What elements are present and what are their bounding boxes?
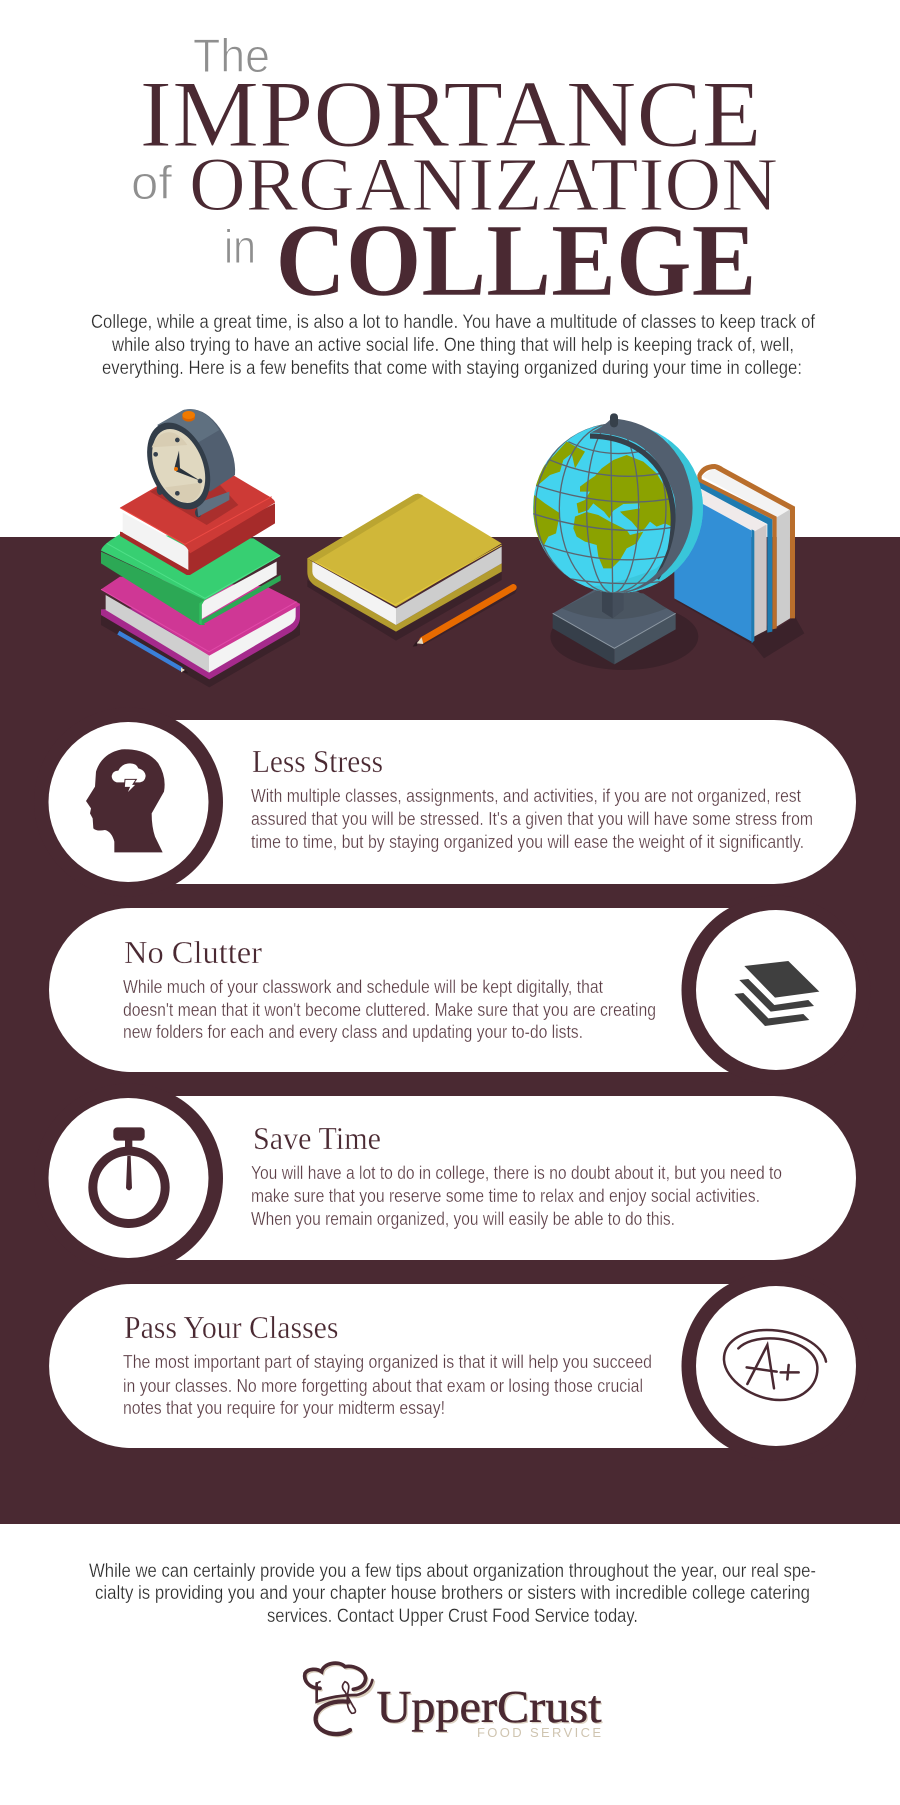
globe stand arc bbox=[590, 413, 693, 594]
title: IMPORTANCE bbox=[140, 61, 762, 167]
globe sphere with continents and grid bbox=[533, 424, 703, 593]
alarm clock bbox=[135, 409, 235, 519]
illustration: globe on stand and upright books bbox=[530, 410, 804, 670]
blue pencil bbox=[118, 633, 188, 673]
title bbox=[131, 29, 778, 318]
text: less stress body: assured that you will be stressed. It's a given that you will have some stress from bbox=[251, 809, 813, 829]
intro paragraph: everything. Here is a few benefits that come with staying organized during your time in college: bbox=[102, 358, 802, 379]
text: no clutter body: doesn't mean that it won't become cluttered. Make sure that you are creating bbox=[123, 1000, 656, 1020]
logo icon: chef hat bbox=[305, 1663, 374, 1736]
green book bbox=[101, 534, 281, 625]
intro paragraph: while also trying to have an active social life. One thing that will help is keeping track of, well, bbox=[111, 335, 794, 356]
logo wordmark: UpperCrust bbox=[376, 1682, 602, 1732]
magenta book bbox=[101, 577, 300, 687]
intro paragraph bbox=[91, 312, 816, 379]
text: no clutter body: new folders for each and every class and updating your to-do lists. bbox=[123, 1022, 583, 1042]
upright books bbox=[674, 464, 795, 643]
text: pass your classes body: in your classes. No more forgetting about that exam or losing those crucial bbox=[123, 1376, 643, 1396]
closing paragraph bbox=[89, 1561, 816, 1627]
text: less stress body: time to time, but by staying organized you will ease the weight of it significantly. bbox=[251, 832, 804, 852]
text: save time body: You will have a lot to do in college, there is no doubt about it, but you need to bbox=[251, 1163, 782, 1183]
title: in bbox=[224, 220, 256, 273]
globe base bbox=[553, 578, 676, 664]
text: less stress body bbox=[251, 786, 813, 852]
heading: save time: Save Time bbox=[253, 1120, 381, 1156]
logo tagline: FOOD SERVICE bbox=[477, 1725, 601, 1740]
text: pass your classes body: The most important part of staying organized is that it will help you succeed bbox=[123, 1352, 652, 1372]
heading: pass your classes: Pass Your Classes bbox=[124, 1309, 338, 1345]
intro paragraph: College, while a great time, is also a lot to handle. You have a multitude of classes to keep track of bbox=[91, 312, 816, 333]
globe and book shadows bbox=[550, 600, 804, 670]
illustration: yellow book and orange pencil bbox=[307, 494, 517, 647]
icon: head with storm cloud bbox=[86, 749, 165, 852]
title: ORGANIZATION bbox=[189, 143, 778, 227]
red book bbox=[120, 458, 275, 575]
text: no clutter body bbox=[123, 977, 656, 1042]
icon: stacked sheets bbox=[734, 961, 819, 1026]
text: save time body: When you remain organized, you will easily be able to do this. bbox=[251, 1209, 675, 1229]
panel: no clutter bbox=[49, 896, 870, 1084]
text: pass your classes body bbox=[123, 1352, 652, 1418]
title: The bbox=[193, 29, 270, 82]
panel: less stress bbox=[34, 708, 856, 896]
icon: stopwatch bbox=[93, 1127, 165, 1223]
title: COLLEGE bbox=[276, 203, 756, 318]
text: save time body bbox=[251, 1163, 782, 1229]
title: of bbox=[131, 156, 173, 209]
closing paragraph: cialty is providing you and your chapter house brothers or sisters with incredible college catering bbox=[95, 1583, 810, 1604]
closing paragraph: services. Contact Upper Crust Food Service today. bbox=[267, 1606, 638, 1627]
illustration: book stack with clock and pencil bbox=[101, 409, 300, 687]
panel: pass your classes bbox=[49, 1272, 870, 1460]
logo: upper crust food service bbox=[305, 1663, 604, 1740]
icon: A plus grade bbox=[724, 1330, 826, 1400]
dark background band bbox=[0, 537, 900, 1524]
heading: less stress: Less Stress bbox=[252, 743, 383, 779]
logo wordmark shadow: UpperCrust bbox=[378, 1684, 604, 1734]
text: pass your classes body: notes that you require for your midterm essay! bbox=[123, 1398, 445, 1418]
heading: no clutter: No Clutter bbox=[124, 934, 262, 970]
text: no clutter body: While much of your classwork and schedule will be kept digitally, that bbox=[123, 977, 603, 997]
panel: save time bbox=[34, 1084, 856, 1272]
text: save time body: make sure that you reserve some time to relax and enjoy social activities. bbox=[251, 1186, 760, 1206]
closing paragraph: While we can certainly provide you a few tips about organization throughout the year, our real spe- bbox=[89, 1561, 816, 1582]
text: less stress body: With multiple classes, assignments, and activities, if you are not organized, rest bbox=[251, 786, 801, 806]
